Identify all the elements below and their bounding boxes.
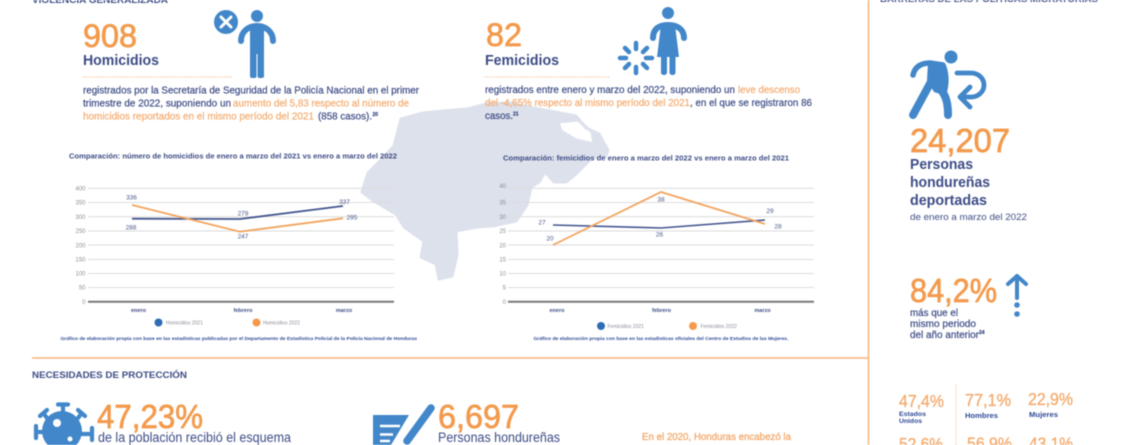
stat: Estados Unidos <box>899 391 944 425</box>
text block: homicidios description: 20 <box>372 112 378 118</box>
text block: periodo: de enero a marzo del 2022 <box>910 212 1027 222</box>
line chart: homicidios: febrero <box>234 308 253 314</box>
icon: virus <box>36 404 92 445</box>
text block: homicidios description: (858 casos). <box>318 112 372 122</box>
line chart: homicidios: 288 <box>126 224 137 232</box>
line chart: homicidios: 50 <box>79 286 86 292</box>
line chart: femicidios: 25 <box>499 229 507 235</box>
line chart: femicidios: 29 <box>766 208 774 215</box>
line chart: femicidios: 10 <box>499 272 507 278</box>
text block: femicidios description: registrados entre enero y marzo del 2022, suponiendo un <box>485 85 735 96</box>
panel: vacunación <box>36 398 291 445</box>
panel: aumento anual <box>910 272 1026 341</box>
text block: homicidios description: registrados por la Secretaría de Seguridad de la Policía Nacional en el primer <box>83 86 420 96</box>
line chart: homicidios: 336 <box>126 194 137 202</box>
stat: 24,207: 24,207 <box>910 122 1010 159</box>
source note: femicidios: Gráfico de elaboración propia con base en las estadísticas oficiales del Centro de Estudios de las Mujeres. <box>534 336 788 341</box>
text block: comparación anual: mismo periodo <box>910 319 976 330</box>
text block: personas hondureñas deportadas: Personas <box>910 157 973 173</box>
line chart: femicidios: 28 <box>774 224 782 230</box>
stat: hombres: 77,1% <box>965 390 1011 410</box>
line chart: homicidios: 247 <box>238 234 249 240</box>
text block: femicidios description: 21 <box>513 112 519 118</box>
text block: femicidios description: del -4,65% respecto al mismo período del 2021 <box>485 98 690 109</box>
stat: Estados Unidos: Estados <box>899 411 926 418</box>
stat: 6,697: 6,697 <box>438 398 519 435</box>
line chart: homicidios: 350 <box>75 201 86 207</box>
legend: femicidios <box>597 322 737 330</box>
legend: homicidios: Homicidios 2022 <box>263 320 300 326</box>
line chart: homicidios: 400 <box>75 186 86 192</box>
text block: homicidios description <box>83 86 420 122</box>
line chart: femicidios: 38 <box>657 197 665 204</box>
text block: homicidios description: aumento del 5,83 respecto al número de <box>233 98 409 110</box>
line chart: femicidios: 26 <box>656 232 663 238</box>
line chart: femicidios: 35 <box>499 201 507 207</box>
text block: homicidios description: trimestre de 2022, suponiendo un <box>83 98 231 110</box>
line chart: homicidios <box>75 186 394 314</box>
icon: document and pen <box>373 407 431 445</box>
text block: personas hondureñas: Personas hondureñas <box>438 430 560 445</box>
text block: comparación anual <box>910 308 985 341</box>
icon: up arrow <box>1008 276 1026 317</box>
line chart: homicidios: 279 <box>238 211 249 218</box>
section heading: necesidades de protección: NECESIDADES DE PROTECCIÓN <box>32 369 187 380</box>
line chart: homicidios: 100 <box>75 272 86 278</box>
text block: femicidios description <box>485 85 812 122</box>
text block: femicidios description: , en el que se registraron 86 <box>690 98 812 109</box>
icon: deported person <box>913 50 984 115</box>
line chart: femicidios: 5 <box>503 286 507 292</box>
line chart: femicidios: enero <box>550 308 565 314</box>
line chart: femicidios: 40 <box>499 184 507 190</box>
chart title: homicidios: Comparación: número de homicidios de enero a marzo del 2021 vs enero a marzo del 2022 <box>69 154 397 160</box>
stat: mujeres <box>1028 389 1073 419</box>
legend: homicidios: Homicidios 2021 <box>166 320 203 326</box>
panel: personas hondureñas <box>373 398 560 445</box>
text block: personas hondureñas deportadas: deportadas <box>910 193 987 209</box>
line chart: homicidios: 295 <box>347 215 358 222</box>
source note: homicidios: Gráfico de elaboración propia con base en las estadísticas publicadas por el Departamento de Estadística Policial de la Policía Nacional de Honduras <box>60 336 417 341</box>
stat: mujeres: Mujeres <box>1029 412 1058 419</box>
line chart: femicidios: 20 <box>546 236 554 242</box>
line chart: homicidios: enero <box>131 308 147 314</box>
icon: woman with spinner <box>620 7 684 75</box>
text block: personas hondureñas deportadas: hondureñas <box>910 175 990 191</box>
stat: Estados Unidos: Unidos <box>899 418 922 425</box>
line chart: homicidios: 250 <box>75 229 86 235</box>
line chart: homicidios: 150 <box>75 258 86 264</box>
panel: femicidios <box>485 7 812 122</box>
stat: 84,2%: 84,2% <box>910 272 997 309</box>
stat: mujeres: 22,9% <box>1028 389 1073 409</box>
map of Honduras <box>362 103 608 279</box>
label: femicidios: Femicidios <box>485 53 559 69</box>
line chart: femicidios: 30 <box>499 215 507 221</box>
stat: 82: 82 <box>486 17 522 53</box>
chart title: femicidios: Comparación: femicidios de enero a marzo del 2022 vs enero a marzo del 2021 <box>503 156 789 162</box>
stat: Estados Unidos: 47,4% <box>899 391 944 411</box>
line chart: femicidios: 0 <box>503 300 507 306</box>
legend: homicidios <box>154 318 300 326</box>
legend: femicidios: Femicidios 2021 <box>608 324 644 330</box>
line chart: femicidios: marzo <box>754 308 771 314</box>
text block: comparación anual: del año anterior <box>910 330 980 341</box>
line chart: homicidios: 337 <box>339 199 350 206</box>
text block: homicidios description: homicidios reportados en el mismo período del 2021 <box>83 112 314 122</box>
line chart: femicidios: 27 <box>538 220 546 227</box>
callout: 2020: En el 2020, Honduras encabezó la <box>642 432 791 443</box>
line chart: homicidios: 200 <box>75 244 86 250</box>
panel: homicidios <box>83 10 420 122</box>
line chart: femicidios <box>499 184 814 314</box>
line chart: femicidios: 20 <box>499 244 507 250</box>
stat: hombres: Hombres <box>965 413 998 420</box>
icon: person with x <box>214 10 273 78</box>
label: homicidios: Homicidios <box>83 53 159 69</box>
panel: desglose de deportaciones <box>899 384 1073 445</box>
text block: vacunación: de la población recibió el esquema <box>98 430 291 445</box>
text block: femicidios description: casos. <box>485 111 513 122</box>
line chart: femicidios: febrero <box>652 308 672 314</box>
text block: personas hondureñas deportadas <box>910 157 990 209</box>
line chart: homicidios: marzo <box>336 308 353 314</box>
stat: 908: 908 <box>83 18 137 54</box>
line chart: homicidios: 0 <box>82 300 86 306</box>
panel: personas deportadas <box>910 50 1027 222</box>
text block: femicidios description: leve descenso <box>738 85 800 96</box>
stat: 47,23%: 47,23% <box>97 398 203 435</box>
line chart: femicidios: 15 <box>499 258 507 264</box>
stat: hombres <box>965 390 1011 420</box>
text block: comparación anual: más que el <box>910 308 958 319</box>
line chart: homicidios: 300 <box>75 215 86 221</box>
legend: femicidios: Femicidios 2022 <box>700 324 737 330</box>
text block: comparación anual: 24 <box>979 330 985 336</box>
